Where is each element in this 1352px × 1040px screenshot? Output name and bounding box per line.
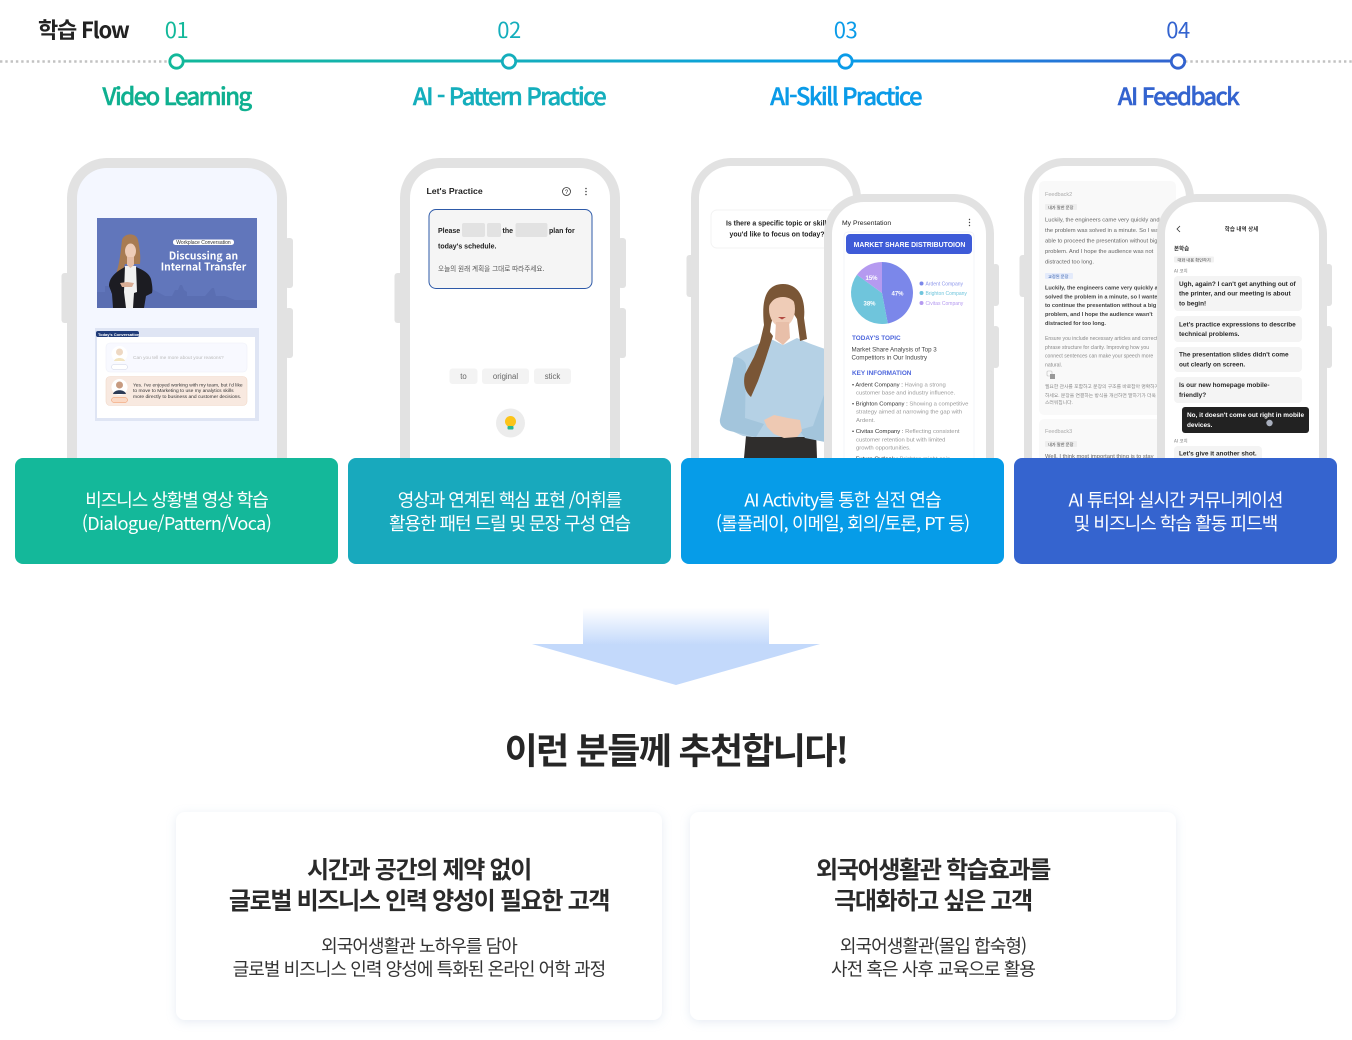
slide text: • Future Outlook : Brighton might gain	[852, 456, 950, 462]
card: global talent customers: 글로벌 비즈니스 인력 양성이 필요한 고객	[229, 881, 609, 916]
phone 4 back: feedback list: problem. And I hope the audience was not	[1045, 249, 1154, 255]
phone 4 back: feedback list: to continue the presentation without a big	[1045, 303, 1157, 309]
phone 4 back: feedback list: able to proceed the presentation without big	[1045, 238, 1157, 244]
slide text: • Ardent Company : Having a strong	[852, 382, 946, 388]
panel: step 3 description: AI Activity를 통한 실전 연습	[744, 486, 941, 512]
phone 4 back: feedback list: distracted too long.	[1045, 260, 1094, 266]
slide text: growth opportunities.	[856, 446, 911, 452]
slide text: Ardent.	[856, 418, 875, 424]
chat bubbles: to begin!	[1179, 300, 1206, 308]
conversation card: Yes. I've enjoyed working with my team, but I'd like	[133, 382, 243, 388]
slide text: Competitors in Our Industry	[852, 354, 928, 362]
conversation card: Can you tell me more about your reasons?	[133, 355, 224, 361]
conversation card: more directly to business and customer decisions.	[133, 394, 241, 400]
card: global talent customers	[176, 812, 662, 1020]
question bubble: you'd like to focus on today?	[730, 232, 825, 238]
panel: step 2 description: 활용한 패턴 드릴 및 문장 구성 연습	[389, 510, 631, 536]
AI tutor figure	[720, 284, 825, 458]
phone 3 front: presentation: My Presentation	[842, 220, 891, 227]
pie legend	[920, 282, 967, 307]
step 02 label: AI - Pattern Practice	[413, 77, 606, 112]
card: maximize effect customers: 사전 혹은 사후 교육으로 활용	[831, 956, 1035, 982]
slide text: • Brighton Company : Showing a competitive	[852, 402, 969, 408]
icon: hint bulb	[496, 408, 525, 438]
card: maximize effect customers: 극대화하고 싶은 고객	[834, 881, 1032, 916]
chat bubbles: technical problems.	[1179, 331, 1240, 338]
panel: step 2 description: 영상과 연계된 핵심 표현 /어휘를	[398, 486, 622, 512]
chat bubbles: Is our new homepage mobile-	[1179, 382, 1270, 389]
card: maximize effect customers	[690, 812, 1176, 1020]
card: global talent customers: 외국어생활관 노하우를 담아	[321, 932, 518, 958]
timeline	[0, 55, 1352, 68]
face	[769, 291, 795, 327]
conversation card	[95, 328, 259, 421]
phone 4 front: learning detail: 본학습	[1174, 244, 1189, 252]
chat bubbles: the printer, and our meeting is about	[1179, 290, 1291, 298]
icon: help: ?	[565, 190, 569, 196]
step 04 label	[1118, 13, 1240, 112]
word chips	[450, 368, 571, 384]
exercise card: 오늘의 원래 계획을 그대로 따라주세요.	[438, 263, 544, 273]
panel: step 2 description	[348, 458, 671, 564]
phone 4 back: feedback list: 내가 말한 문장	[1048, 204, 1074, 211]
step 01 label: 01	[165, 13, 188, 45]
phone 4 back: feedback list	[1020, 158, 1194, 469]
card: global talent customers: 글로벌 비즈니스 인력 양성에 특화된 온라인 어학 과정	[233, 956, 605, 982]
question bubble	[711, 210, 841, 248]
exercise card	[429, 210, 592, 288]
slide text	[852, 335, 969, 462]
panel: step 3 description: (롤플레이, 이메일, 회의/토론, PT 등)	[716, 510, 969, 536]
word chips: original	[493, 372, 518, 381]
word chips: stick	[545, 372, 560, 381]
card: global talent customers: 시간과 공간의 제약 없이	[307, 850, 531, 885]
video thumbnail: Workplace Conversation	[176, 240, 231, 246]
icon: help	[562, 188, 570, 196]
chat bubbles: Let's practice expressions to describe	[1179, 322, 1296, 328]
phone 4 front: learning detail: 대화 내용 확인하기	[1178, 256, 1211, 264]
phone 4 front: learning detail: AI 코치	[1174, 268, 1188, 274]
slide text: customer retention but with limited	[856, 438, 945, 444]
video thumbnail: Discussing an	[169, 248, 238, 262]
panel: step 1 description: (Dialogue/Pattern/Voca)	[82, 510, 271, 536]
chat bubbles: No, it doesn't come out right in mobile	[1187, 412, 1304, 419]
phone 4 back: feedback list: 내가 말한 문장	[1048, 441, 1074, 448]
phone 4 back: feedback list: phrase structure for clarity. Improving how you	[1045, 345, 1149, 351]
shirt	[733, 338, 825, 440]
card: maximize effect customers: 외국어생활관(몰입 합숙형)	[840, 932, 1026, 958]
trousers	[744, 430, 817, 458]
chat bubbles: Let's give it another shot.	[1179, 450, 1257, 458]
panel: step 4 description: 및 비즈니스 학습 활동 피드백	[1074, 510, 1277, 536]
chat bubbles: devices.	[1187, 422, 1213, 429]
pie legend: Ardent Company	[926, 282, 964, 288]
step 03 label: 03	[834, 13, 857, 45]
icon: translate	[1047, 371, 1055, 379]
phone 2: pattern practice: Let's Practice	[426, 186, 483, 196]
exercise card: Please	[438, 228, 460, 235]
step 01 label	[101, 13, 252, 112]
pie legend: Civitas Company	[926, 301, 964, 307]
slide header: MARKET SHARE DISTRIBUTOION	[854, 242, 965, 249]
slide text: • Civitas Company : Reflecting consistent	[852, 429, 960, 435]
phone 4 front: learning detail	[1157, 194, 1332, 470]
pie chart: 38%	[863, 302, 876, 308]
heading: 학습 Flow: 학습 Flow	[38, 13, 130, 45]
phone 4 back: feedback list: natural.	[1045, 362, 1062, 368]
chat bubbles: AI 코치	[1174, 438, 1188, 444]
slide text: strategy aimed at narrowing the gap with	[856, 410, 962, 416]
phone 4 back: feedback list: 필요한 관사를 포함하고 문장의 구조를 바로잡아 명확하게	[1045, 383, 1159, 390]
phone 4 back: feedback list: Feedback3	[1045, 429, 1072, 435]
pie chart: 47%	[891, 292, 904, 298]
pie chart	[851, 262, 913, 324]
arrow: down	[532, 608, 820, 685]
icon: more menu	[969, 219, 970, 226]
phone 4 back: feedback list: distracted for too long.	[1045, 321, 1106, 327]
panel: step 1 description: 비즈니스 상황별 영상 학습	[85, 486, 268, 512]
phone 4 back: feedback list: Luckily, the engineers came very quickly and	[1045, 286, 1165, 292]
question bubble: Is there a specific topic or skill	[726, 220, 826, 228]
conversation card: Today's Conversation	[98, 332, 140, 337]
chat bubbles: out clearly on screen.	[1179, 362, 1245, 368]
phone 1: video learning	[62, 158, 293, 458]
step 03 label	[770, 13, 922, 112]
phone 4 back: feedback list: problem, and I hope the audience wasn't	[1045, 312, 1153, 318]
video thumbnail	[97, 218, 257, 308]
slide header	[846, 234, 972, 254]
word chips: to	[460, 372, 467, 381]
phone 3 back: AI tutor	[686, 158, 861, 458]
step 02 label	[413, 13, 606, 112]
exercise card: today's schedule.	[438, 244, 497, 250]
phone 4 back: feedback list: Well, I think most important thing is to stay	[1045, 454, 1154, 460]
hair	[744, 284, 807, 397]
phone 4 back: feedback list: the problem was solved in a minute. So I was	[1045, 228, 1161, 234]
slide text: customer base and industry influence.	[856, 390, 956, 396]
exercise card: plan for	[549, 228, 575, 235]
step 04 label: 04	[1166, 13, 1190, 45]
phone 4 back: feedback list: Feedback2	[1045, 192, 1072, 198]
phone 4 front: learning detail: 학습 내역 상세	[1225, 225, 1258, 233]
phone 4 back: feedback list: solved the problem in a minute, so I wanted	[1045, 294, 1162, 300]
pie chart: 15%	[865, 276, 878, 282]
step 01 label: Video Learning	[101, 77, 252, 112]
video presenter	[109, 234, 152, 308]
panel: step 4 description: AI 튜터와 실시간 커뮤니케이션	[1069, 486, 1282, 512]
phone 4 back: feedback list: 하세요. 문장을 연결하는 방식을 개선하면 말하기가 더욱	[1045, 392, 1156, 399]
panel: step 4 description	[1014, 458, 1337, 564]
slide text: TODAY'S TOPIC	[852, 335, 901, 342]
slide text: KEY INFORMATION	[852, 370, 912, 377]
chat bubbles: Ugh, again? I can't get anything out of	[1179, 281, 1297, 288]
card: maximize effect customers: 외국어생활관 학습효과를	[816, 850, 1051, 885]
panel: step 1 description	[15, 458, 338, 564]
right sleeve	[799, 392, 825, 442]
left sleeve	[720, 357, 764, 437]
chat bubbles	[1174, 276, 1309, 470]
hands	[764, 415, 802, 438]
slide text: Market Share Analysis of Top 3	[852, 346, 937, 354]
chat bubbles: friendly?	[1179, 392, 1206, 399]
step 04 label: AI Feedback	[1118, 77, 1240, 112]
phone 4 back: feedback list: 스러워집니다.	[1045, 399, 1073, 406]
phone 2: pattern practice	[394, 158, 626, 458]
heading: recommendation: 이런 분들께 추천합니다!	[505, 722, 847, 774]
phone 3 front: presentation	[824, 194, 999, 472]
phone 4 back: feedback list: Luckily, the engineers came very quickly and	[1045, 218, 1160, 224]
conversation card: to move to Marketing to use my analytics skills	[133, 388, 234, 394]
phone 4 back: feedback list: connect sentences can make your speech more	[1045, 354, 1153, 360]
panel: step 3 description	[681, 458, 1004, 564]
pie legend: Brighton Company	[926, 291, 967, 297]
phone 4 back: feedback list: 교정된 문장	[1048, 273, 1069, 280]
step 02 label: 02	[497, 13, 521, 45]
step 03 label: AI-Skill Practice	[770, 77, 922, 112]
video thumbnail: Internal Transfer	[161, 258, 247, 274]
phone 4 back: feedback list: Ensure you include necessary articles and correct	[1045, 336, 1158, 342]
icon: back	[1177, 226, 1180, 232]
chat bubbles: The presentation slides didn't come	[1179, 352, 1289, 358]
exercise card: the	[502, 228, 513, 235]
icon: more menu	[585, 188, 587, 195]
